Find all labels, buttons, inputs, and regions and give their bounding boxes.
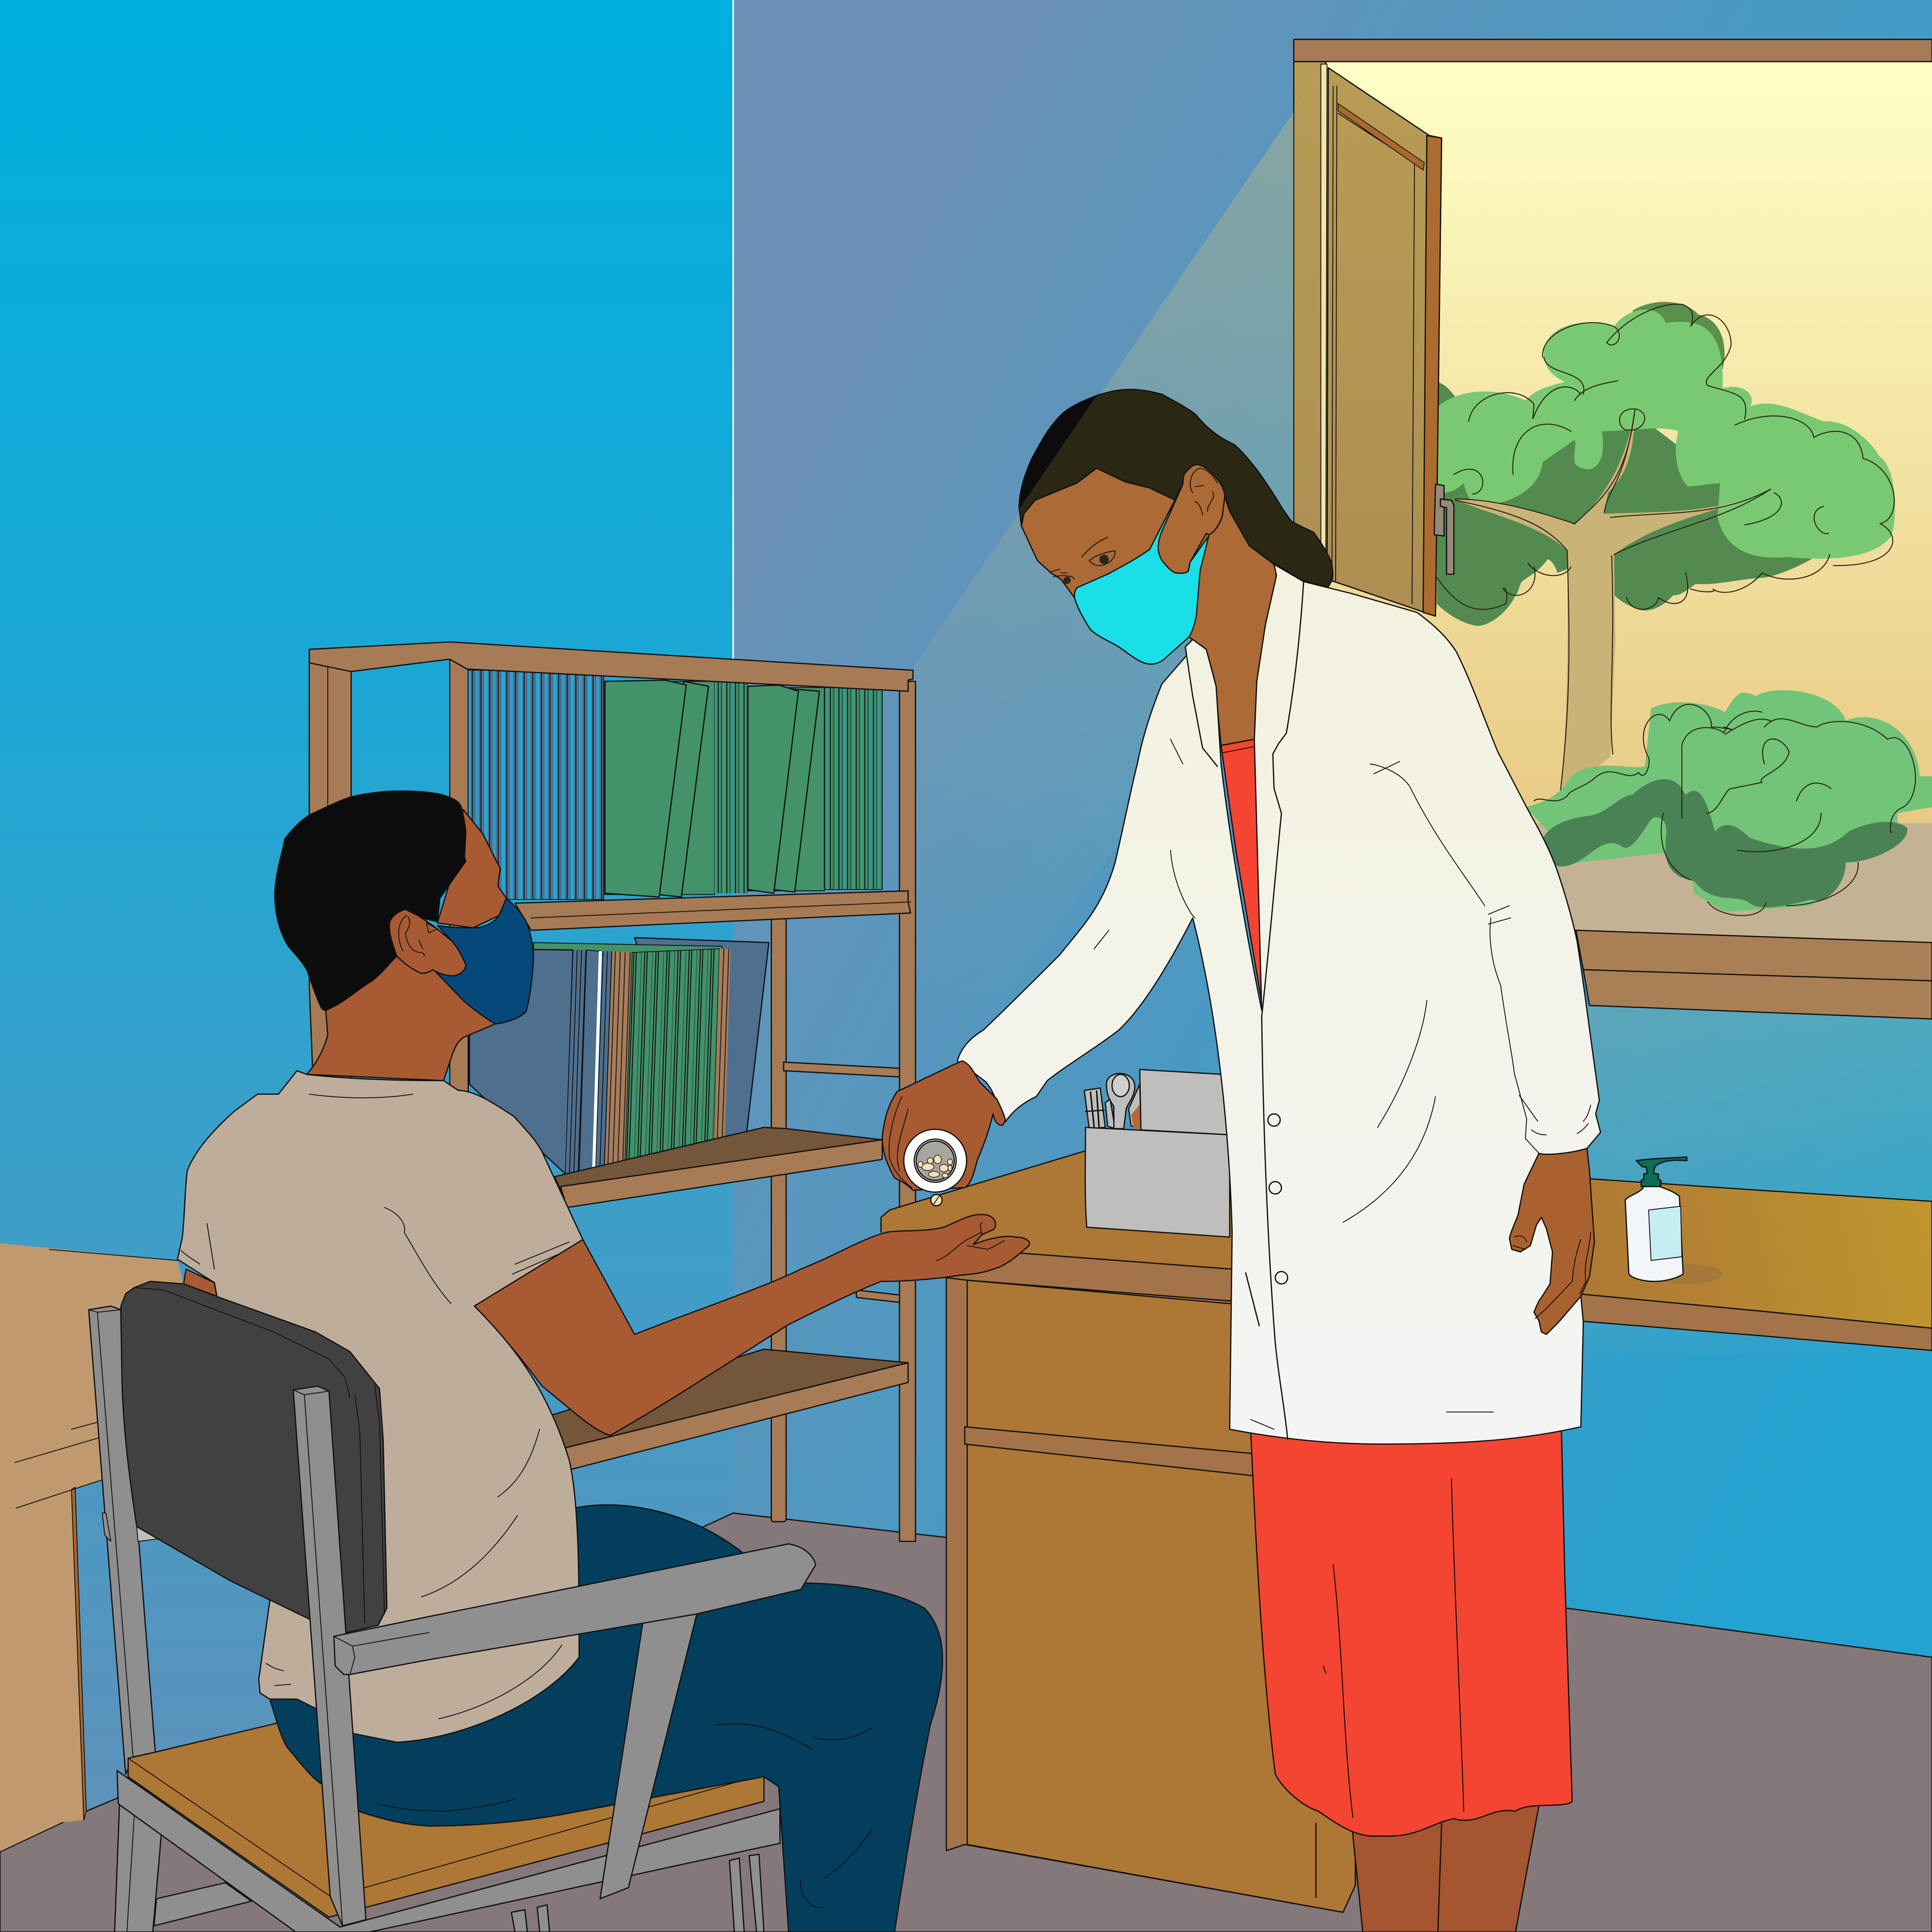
warm wash on wall below window <box>1577 1004 1932 1355</box>
patient's chair: rear post and seat cushion <box>89 1306 764 1917</box>
background: left wall <box>0 0 734 1932</box>
door panel detail <box>1332 86 1422 604</box>
top edge of green folders <box>534 942 722 955</box>
blue folders <box>468 670 604 899</box>
grey spines <box>565 950 586 1174</box>
light cone from the doorway <box>914 61 1328 1109</box>
ear detail <box>399 915 437 956</box>
ear detail <box>1190 468 1217 515</box>
rear chair post <box>89 1306 155 1774</box>
left foreground table <box>0 1243 185 1852</box>
pens <box>1084 1088 1105 1129</box>
desk organiser with stationery <box>1084 1069 1230 1237</box>
coat lapel lines <box>1185 582 1303 1017</box>
paper card <box>1140 1069 1230 1135</box>
centre post <box>772 918 786 1522</box>
lower row of folders <box>469 938 769 1174</box>
sky <box>1324 61 1932 949</box>
wall corner highlight <box>733 0 734 659</box>
white sheet <box>592 951 602 1174</box>
bottle shadow <box>1653 1264 1722 1284</box>
shrub dark foliage <box>1541 779 1908 908</box>
white lab coat <box>957 564 1601 1444</box>
dark hair highlight <box>1019 395 1097 507</box>
background: right wall <box>733 0 1932 1932</box>
red skirt <box>1251 1417 1572 1836</box>
trousers upper leg <box>569 1505 764 1639</box>
table side <box>0 1490 84 1852</box>
window with outdoor view <box>1294 39 1932 1019</box>
door handle <box>1434 484 1454 574</box>
tree <box>1433 302 1895 796</box>
armrest <box>334 1544 816 1674</box>
pump <box>1636 1157 1687 1187</box>
forearm and hand <box>474 1215 1030 1435</box>
seated patient <box>177 791 1030 1932</box>
left outer post <box>309 659 351 1078</box>
shirt <box>177 1071 583 1742</box>
coat fold lines <box>1094 739 1591 1429</box>
brown folders <box>605 951 632 1174</box>
inner rear post <box>450 654 468 1098</box>
seat cushion <box>128 1722 764 1917</box>
window frame top <box>1294 39 1932 61</box>
ear <box>389 909 466 976</box>
rear arm <box>184 1269 217 1296</box>
right post <box>899 681 915 1541</box>
pill bottle <box>904 1129 966 1192</box>
green binder backing <box>604 681 715 895</box>
top board <box>309 642 913 691</box>
grey strip under backrest <box>137 1527 158 1541</box>
blue folder <box>469 949 573 1174</box>
label <box>1649 1206 1682 1261</box>
desk <box>881 1151 1932 1912</box>
shrubs <box>1525 690 1932 915</box>
hand holding pill bottle <box>882 1061 1005 1190</box>
cloth face mask <box>432 898 534 1024</box>
backrest seams <box>134 1288 384 1623</box>
hair and ponytail <box>1019 389 1333 589</box>
doctor <box>882 389 1601 1932</box>
desk top edges <box>881 1151 1232 1269</box>
window sill <box>1576 930 1932 1019</box>
desk rail <box>965 1427 1257 1476</box>
chair stretcher <box>154 1883 251 1926</box>
neck <box>307 956 495 1081</box>
neck <box>1183 484 1276 745</box>
shrub light foliage <box>1525 690 1932 912</box>
ear <box>1158 465 1225 573</box>
upper row of folders <box>468 670 882 899</box>
bottle body <box>1625 1187 1683 1282</box>
desk drawer and cupboard front <box>967 1280 1355 1912</box>
front chair post <box>293 1386 366 1926</box>
legs <box>1352 1799 1540 1932</box>
coat placket line <box>1245 1017 1288 1439</box>
gap between legs <box>1438 1823 1442 1932</box>
fourth shelf <box>546 1349 908 1473</box>
green folders <box>625 949 720 1170</box>
door leaf <box>1327 68 1442 616</box>
arm support <box>600 1612 697 1899</box>
desk top <box>881 1151 1232 1269</box>
desk top to the right of the doctor <box>1577 1178 1932 1328</box>
trunk and branches <box>1455 409 1771 796</box>
coat shell with sleeves <box>957 564 1601 1444</box>
table leg edge <box>71 1487 86 1820</box>
trouser crease lines <box>377 1724 872 1908</box>
chair stub behind post <box>102 1513 111 1541</box>
tilted green folders <box>658 681 708 897</box>
red inner shirt <box>1221 739 1264 1017</box>
patient's chair: backrest, frame and arm <box>115 1282 816 1932</box>
backrest <box>121 1282 387 1633</box>
large tilted blue folder <box>635 938 769 1153</box>
hair <box>275 791 466 1010</box>
table wood lines <box>0 1249 177 1852</box>
ground outside <box>1528 823 1932 949</box>
cross bars <box>784 1062 899 1302</box>
trousers lower body <box>270 1583 942 1932</box>
third shelf <box>554 1127 882 1207</box>
eyes and brows <box>1051 537 1115 584</box>
hand resting at side <box>1510 1148 1595 1334</box>
frame light strip <box>1321 64 1327 579</box>
desk body <box>946 1278 1355 1912</box>
organiser box <box>1085 1127 1230 1237</box>
desk front right <box>1577 1294 1932 1350</box>
floor <box>0 1513 1932 1932</box>
window frame left <box>1294 61 1326 579</box>
left chair leg <box>115 1804 161 1932</box>
green striped spines <box>715 681 748 893</box>
brown end folders <box>714 949 731 1160</box>
desk side band <box>946 1253 1232 1301</box>
table top <box>0 1243 185 1513</box>
seat frame <box>117 1771 780 1932</box>
coat buttons <box>1268 1114 1288 1284</box>
bookshelf <box>309 642 915 1541</box>
door edge <box>1423 136 1442 616</box>
falling pill <box>931 1194 942 1206</box>
pills in bottle <box>918 1155 952 1178</box>
scissors <box>1105 1073 1141 1129</box>
tree shadow foliage <box>1437 382 1811 626</box>
tree scribble outlines <box>1433 304 1894 796</box>
face <box>1021 468 1200 630</box>
shirt creases <box>181 1094 569 1719</box>
open door <box>1327 68 1442 616</box>
second shelf <box>515 891 911 930</box>
face <box>437 810 507 928</box>
shrub scribble outlines <box>1534 705 1915 915</box>
rear right legs <box>511 1854 764 1932</box>
turquoise face mask <box>1075 484 1209 664</box>
tree light foliage <box>1438 310 1895 559</box>
hand sanitiser bottle <box>1625 1157 1722 1284</box>
